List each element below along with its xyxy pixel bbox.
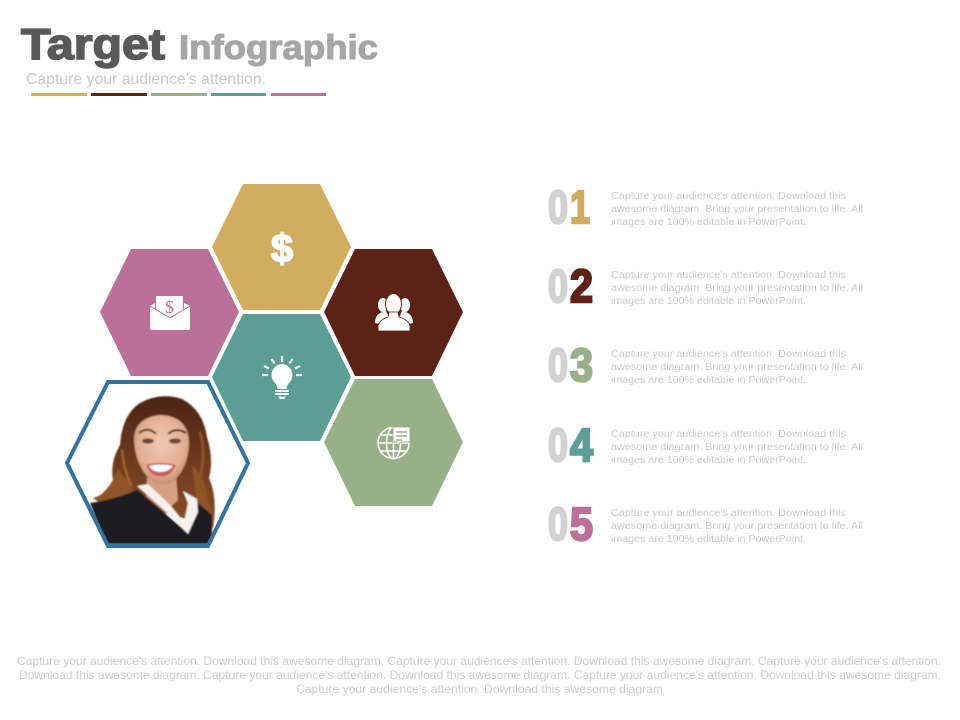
description 4: awesome diagram. Bring your presentation to life. All <box>611 442 863 453</box>
list item 3 <box>548 339 863 391</box>
description 3: Capture your audience's attention. Download this <box>611 349 846 360</box>
number 01: 0 <box>548 181 568 233</box>
list item 2 <box>548 260 863 312</box>
description 2: Capture your audience's attention. Download this <box>611 270 846 281</box>
hexagon: pink <box>100 249 239 376</box>
description 1: Capture your audience's attention. Download this <box>611 191 846 202</box>
number 02 <box>548 260 593 312</box>
description 4 <box>611 429 863 466</box>
title: Infographic <box>179 29 378 67</box>
number 01 <box>548 181 590 233</box>
photo hexagon with portrait <box>67 382 248 546</box>
number 03: 0 <box>548 339 568 391</box>
icon: envelope with money <box>150 296 190 330</box>
description 2 <box>611 270 863 307</box>
hexagon: green <box>324 379 463 506</box>
footer text <box>17 654 941 696</box>
description 2: images are 100% editable in PowerPoint. <box>611 296 806 307</box>
number 05: 0 <box>548 498 568 550</box>
icon: dollar sign: $ <box>271 227 293 271</box>
number 02: 2 <box>570 260 593 312</box>
hexagon: gold <box>212 184 351 310</box>
icon: globe with speech bubble <box>378 427 410 458</box>
hexagon: teal <box>212 314 351 441</box>
description 2: awesome diagram. Bring your presentation to life. All <box>611 283 863 294</box>
number 05 <box>548 498 593 550</box>
description 3: images are 100% editable in PowerPoint. <box>611 375 806 386</box>
description 5: awesome diagram. Bring your presentation to life. All <box>611 521 863 532</box>
colour bars <box>31 93 326 96</box>
number 04: 0 <box>548 419 568 471</box>
subtitle: Capture your audience's attention. <box>26 71 266 88</box>
description 1 <box>611 191 863 228</box>
description 4: Capture your audience's attention. Download this <box>611 429 846 440</box>
description 5: Capture your audience's attention. Download this <box>611 508 846 519</box>
hexagon: brown <box>324 249 463 376</box>
number 05: 5 <box>570 498 593 550</box>
title: Target <box>21 20 165 69</box>
number 02: 0 <box>548 260 568 312</box>
footer text: Download this awesome diagram. Capture your audience's attention. Download this awesome diagram. Capture your audience's attention. Download this awesome diagram. <box>19 668 941 682</box>
description 3: awesome diagram. Bring your presentation to life. All <box>611 362 863 373</box>
description 1: awesome diagram. Bring your presentation to life. All <box>611 204 863 215</box>
icon: envelope with money: $ <box>165 297 174 317</box>
description 5: images are 100% editable in PowerPoint. <box>611 534 806 545</box>
description 1: images are 100% editable in PowerPoint. <box>611 217 806 228</box>
hexagon diagram <box>67 184 463 546</box>
footer text: Capture your audience's attention. Download this awesome diagram. Capture your audience's attention. Download this awesome diagram. Capture your audience's attention. <box>17 654 941 668</box>
icon: light bulb <box>262 356 302 399</box>
list item 4 <box>548 419 863 471</box>
number 04: 4 <box>570 419 593 471</box>
description 5 <box>611 508 863 545</box>
portrait: businesswoman <box>90 396 215 544</box>
description 4: images are 100% editable in PowerPoint. <box>611 455 806 466</box>
title <box>21 20 378 69</box>
number 04 <box>548 419 593 471</box>
footer text: Capture your audience's attention. Download this awesome diagram <box>296 682 663 696</box>
list item 5 <box>548 498 863 550</box>
number 03 <box>548 339 593 391</box>
number 01: 1 <box>570 181 590 233</box>
description 3 <box>611 349 863 386</box>
icon: group of people <box>375 294 413 331</box>
list item 1 <box>548 181 863 233</box>
number 03: 3 <box>570 339 593 391</box>
